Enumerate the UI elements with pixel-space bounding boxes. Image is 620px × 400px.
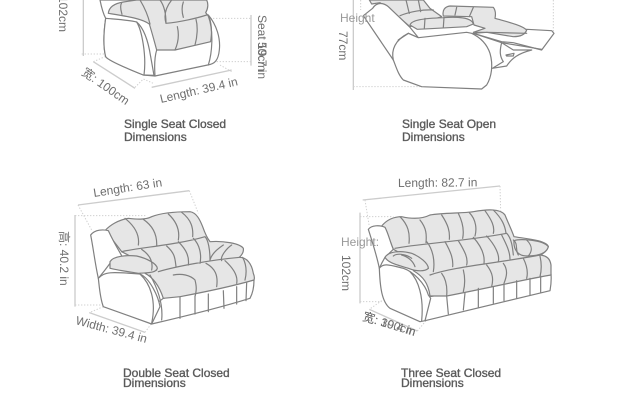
panel: single seat closed bbox=[56, 0, 269, 144]
diagram: double seat sofa bbox=[75, 191, 254, 332]
dimension: overlapping width labels: 宽: 39.4 in bbox=[361, 309, 418, 339]
panel: double seat closed bbox=[57, 175, 254, 390]
heading: double seat closed: Dimensions bbox=[123, 376, 186, 390]
dimension: width 39.4 in: Width: 39.4 in bbox=[74, 313, 149, 346]
dimension: length 39.4 in: Length: 39.4 in bbox=[159, 74, 239, 106]
heading: single seat closed: Dimensions bbox=[124, 130, 187, 144]
dimension: height label: Height: bbox=[341, 235, 379, 249]
dimension: 77cm: 77cm bbox=[336, 31, 350, 60]
dimension: width 100cm: 宽: 100cm bbox=[79, 64, 133, 108]
heading: single seat closed: Single Seat Closed bbox=[124, 117, 226, 131]
heading: single seat open: Single Seat Open bbox=[402, 117, 496, 131]
heading: three seat closed: Three Seat Closed bbox=[401, 366, 501, 380]
dimension: length 63 in: Length: 63 in bbox=[92, 175, 163, 200]
dimension: length 82.7 in: Length: 82.7 in bbox=[398, 175, 477, 190]
heading: three seat closed: Dimensions bbox=[401, 376, 464, 390]
heading: single seat open: Dimensions bbox=[402, 130, 465, 144]
diagram: single seat open recliner bbox=[353, 0, 554, 90]
dimension: overlapping width labels: 宽: 100cm bbox=[361, 309, 418, 339]
diagram: single seat closed sofa bbox=[82, 0, 251, 88]
dimension: seat 50cm: Seat 19.7 in bbox=[255, 15, 269, 79]
dimension: seat 50cm: 50cm bbox=[255, 42, 269, 71]
panel: single seat open bbox=[336, 0, 554, 144]
heading: double seat closed: Double Seat Closed bbox=[123, 366, 230, 380]
dimension: height label: Height bbox=[340, 11, 375, 25]
panel: three seat closed bbox=[339, 175, 551, 390]
dimension: height 40.2 in: 高: 40.2 in bbox=[57, 231, 72, 286]
dimension: 102cm: 102cm bbox=[339, 255, 353, 291]
diagram: three seat sofa bbox=[360, 186, 551, 331]
